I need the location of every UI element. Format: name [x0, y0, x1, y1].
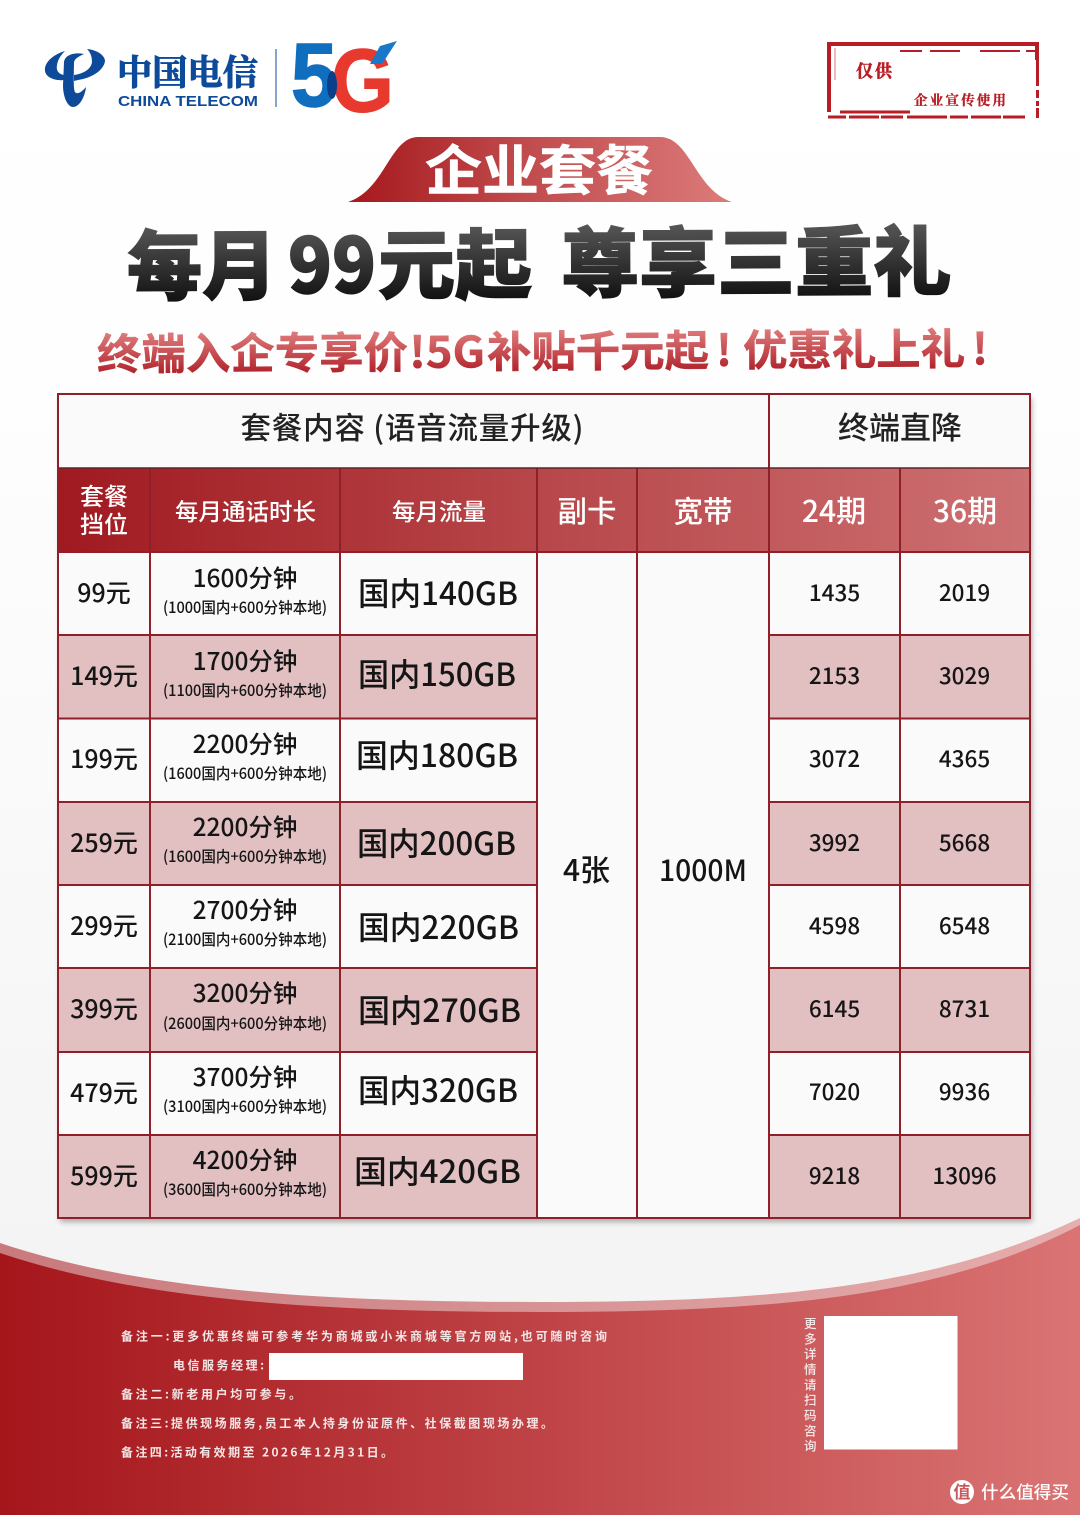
row: 479元: 3700分钟 [193, 1059, 297, 1094]
logo 5G [291, 26, 397, 132]
row: 259元: (1600国内+600分钟本地) [163, 845, 327, 867]
row: 299元: 国内220GB [358, 903, 519, 949]
row: 99元 [77, 560, 990, 618]
column headers: 36期 [933, 487, 997, 531]
row: 299元 [70, 892, 990, 950]
logo: China Telecom [45, 26, 397, 132]
note 4: 备注四:活动有效期至 2026年12月31日。 [121, 1444, 393, 1460]
row: 99元: 1600分钟 [193, 560, 297, 595]
subtitle: 补贴千元起 [487, 317, 709, 380]
table shadow [60, 398, 1032, 1222]
row: 259元: 国内200GB [357, 819, 516, 865]
row: 199元: 3072 [809, 742, 860, 774]
note 1: 备注一:更多优惠终端可参考华为商城或小米商城等官方网站,也可随时咨询 [121, 1328, 607, 1344]
subtitle: !5G [409, 318, 485, 381]
row: 149元: 2153 [809, 659, 860, 691]
row: 299元: 2700分钟 [193, 892, 297, 927]
banner: 企业套餐: 企业套餐 [425, 127, 653, 206]
logo wordmark Chinese: 中国电信 [117, 46, 258, 96]
title: 尊享三重礼 [561, 201, 951, 313]
stamp [828, 44, 1038, 118]
title: 元起 [378, 204, 532, 315]
stamp frame [828, 44, 1038, 118]
row: 399元: 国内270GB [358, 986, 521, 1032]
row: 149元 [70, 643, 990, 701]
icon: watermark badge: 值 [954, 1478, 970, 1503]
stamp text: 企业宣传使用: 企业宣传使用 [914, 89, 1006, 109]
QR caption vertical: 更多详情请扫码咨询 [804, 1313, 817, 1455]
subtitle [97, 315, 988, 383]
QR placeholder [824, 1316, 958, 1450]
row: 479元: 479元 [70, 1074, 138, 1110]
footer notes [121, 1328, 607, 1460]
row: 99元: (1000国内+600分钟本地) [163, 596, 327, 618]
row: 199元: 199元 [70, 740, 138, 776]
row: 399元 [70, 975, 990, 1034]
row: 399元: 8731 [939, 992, 990, 1024]
row: 199元: (1600国内+600分钟本地) [163, 762, 327, 784]
row: 599元: 13096 [932, 1159, 997, 1191]
heading: 终端直降: 终端直降 [838, 403, 962, 448]
row: 399元: 6145 [809, 992, 860, 1024]
pink row fills [58, 635, 1030, 1218]
row: 479元 [70, 1059, 990, 1117]
row: 149元: 国内150GB [358, 650, 516, 696]
column headers: 副卡 [557, 489, 617, 531]
icon: telecom symbol [45, 49, 105, 107]
column headers [80, 477, 997, 540]
subtitle: ! [972, 315, 988, 377]
watermark text: 什么值得买 [981, 1480, 1069, 1504]
row: 259元: 3992 [809, 826, 860, 858]
column headers: 宽带 [673, 489, 733, 531]
subtitle: ! [716, 317, 732, 379]
row: 599元: 国内420GB [354, 1147, 521, 1193]
logo divider [276, 49, 277, 107]
row: 199元 [70, 726, 990, 784]
manager label: 电信服务经理: [173, 1356, 264, 1374]
logo 5G: G [331, 32, 394, 132]
footer red background [0, 1225, 1080, 1515]
row: 299元: 6548 [939, 909, 990, 941]
row: 259元: 5668 [939, 826, 990, 858]
banner: 企业套餐 [348, 127, 732, 206]
row: 259元: 259元 [70, 824, 138, 860]
row: 479元: 7020 [809, 1075, 860, 1107]
subtitle: 优惠礼上礼 [743, 315, 965, 379]
row: 199元: 国内180GB [356, 731, 518, 777]
row: 99元: 1435 [809, 576, 860, 608]
table base [58, 394, 1030, 1218]
title: 99 [288, 205, 376, 315]
row: 599元: 4200分钟 [193, 1142, 297, 1177]
logo 5G: 5 [291, 26, 337, 126]
row: 149元: 149元 [70, 657, 138, 693]
merged cell: 副卡 4张: 4张 [563, 846, 610, 890]
row: 479元: (3100国内+600分钟本地) [163, 1095, 327, 1117]
title [127, 201, 951, 316]
merged cell: 宽带 1000M: 1000M [659, 848, 747, 890]
row: 599元: (3600国内+600分钟本地) [163, 1178, 327, 1200]
row: 149元: 3029 [939, 659, 990, 691]
heading: 套餐内容: 套餐内容 (语音流量升级) [240, 404, 584, 448]
stamp text: 仅供: 仅供 [856, 57, 893, 82]
pricing table [58, 394, 1032, 1222]
header band [58, 468, 1030, 552]
row: 99元: 2019 [939, 576, 990, 608]
row: 599元: 9218 [809, 1159, 860, 1191]
row: 479元: 国内320GB [358, 1066, 518, 1112]
manager input box [269, 1353, 523, 1380]
watermark [950, 1478, 1069, 1504]
title: 每月 [127, 205, 277, 316]
note 2: 备注二:新老用户均可参与。 [121, 1386, 301, 1402]
column headers: 套餐 [80, 477, 128, 512]
row: 259元 [70, 809, 990, 867]
footer wave band [0, 1218, 1080, 1330]
row: 399元: (2600国内+600分钟本地) [163, 1012, 327, 1034]
column headers: 每月流量 [392, 493, 486, 527]
row: 399元: 399元 [70, 990, 138, 1026]
column headers: 24期 [802, 487, 866, 531]
row: 399元: 3200分钟 [193, 975, 297, 1010]
row: 199元: 4365 [939, 742, 990, 774]
row: 479元: 9936 [939, 1075, 990, 1107]
subtitle: 终端入企专享价 [97, 319, 408, 383]
column headers: 每月通话时长 [175, 493, 316, 527]
logo wordmark English: CHINA TELECOM [118, 93, 258, 110]
row: 99元: 99元 [77, 574, 131, 610]
row: 199元: 2200分钟 [193, 726, 297, 761]
column headers: 挡位 [80, 505, 128, 540]
row: 599元 [70, 1142, 997, 1200]
row: 599元: 599元 [70, 1157, 138, 1193]
row: 149元: (1100国内+600分钟本地) [163, 679, 327, 701]
note 3: 备注三:提供现场服务,员工本人持身份证原件、社保截图现场办理。 [121, 1414, 553, 1432]
row: 99元: 国内140GB [358, 569, 518, 615]
row: 299元: 4598 [809, 909, 860, 941]
row: 299元: 299元 [70, 907, 138, 943]
row: 149元: 1700分钟 [193, 643, 297, 678]
row: 299元: (2100国内+600分钟本地) [163, 928, 327, 950]
row: 259元: 2200分钟 [193, 809, 297, 844]
